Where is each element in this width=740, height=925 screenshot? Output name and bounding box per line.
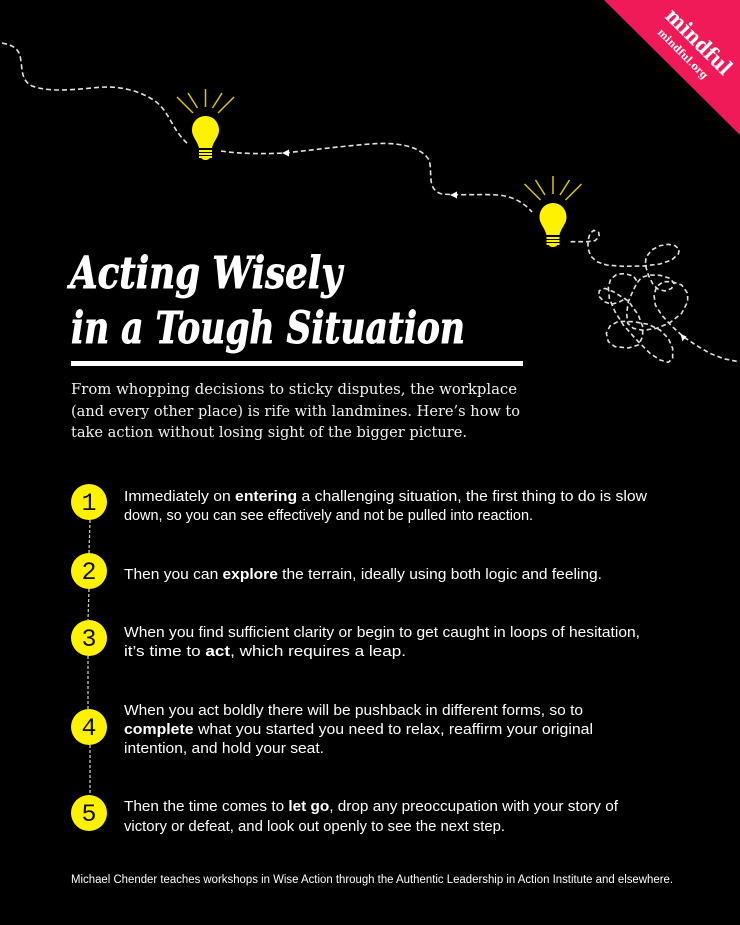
dashed path with arrow: first bulb to second bulb	[221, 143, 532, 212]
step 4: complete what you started you need to relax, reaffirm your original	[124, 722, 593, 738]
intro text: take action without losing sight of the bigger picture.	[71, 423, 467, 441]
step 1	[71, 484, 647, 524]
intro text: (and every other place) is rife with landmines. Here’s how to	[71, 402, 520, 420]
step 5	[71, 795, 619, 835]
corner banner: mindful logo: mindful.org	[655, 27, 710, 82]
corner banner: mindful logo	[604, 0, 740, 135]
step 1: Immediately on entering a challenging situation, the first thing to do is slow	[124, 489, 647, 505]
intro text: From whopping decisions to sticky disputes, the workplace	[71, 380, 517, 398]
dashed path: top left to first bulb	[2, 43, 188, 144]
title: Acting Wisely	[67, 248, 345, 299]
step 4: 4	[81, 714, 97, 743]
title: in a Tough Situation	[71, 303, 465, 354]
step 2: 2	[81, 558, 97, 587]
step 4: When you act boldly there will be pushback in different forms, so to	[124, 703, 583, 719]
step 2: Then you can explore the terrain, ideally using both logic and feeling.	[124, 567, 602, 583]
title rule	[71, 361, 523, 366]
icon: light bulb 1	[177, 89, 234, 160]
step 3: it’s time to act, which requires a leap.	[124, 644, 406, 660]
dashed scribble with arrow from the right	[571, 230, 738, 362]
icon: light bulb 2	[524, 176, 582, 247]
step 3	[71, 620, 640, 660]
step 5: 5	[81, 800, 97, 829]
intro text	[71, 380, 520, 441]
title	[67, 248, 465, 354]
step 4: intention, and hold your seat.	[124, 741, 324, 757]
step 4	[71, 703, 593, 757]
step 1: down, so you can see effectively and not be pulled into reaction.	[124, 508, 533, 524]
step 5: victory or defeat, and look out openly to see the next step.	[124, 819, 505, 835]
step connector line	[88, 520, 90, 795]
step 1: 1	[81, 489, 97, 518]
step 3: When you find sufficient clarity or begin to get caught in loops of hesitation,	[124, 625, 640, 641]
footer credit: Michael Chender teaches workshops in Wise Action through the Authentic Leadership in Action Institute and elsewhere.	[71, 874, 673, 886]
step 2	[71, 553, 602, 589]
step 3: 3	[81, 625, 97, 654]
step 5: Then the time comes to let go, drop any preoccupation with your story of	[124, 799, 619, 815]
